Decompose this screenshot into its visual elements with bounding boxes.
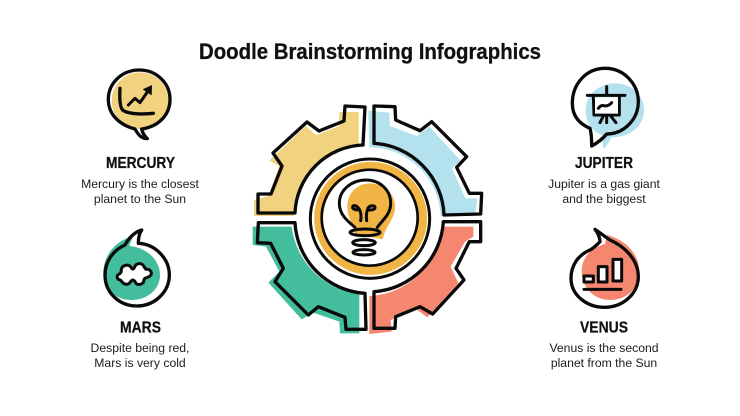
description: mars: Despite being red, (91, 341, 189, 355)
central gear diagram (253, 106, 482, 334)
description: jupiter: Jupiter is a gas giant (548, 177, 660, 191)
description: mercury: Mercury is the closest (81, 177, 200, 191)
panel: venus (549, 229, 659, 370)
heading: mars: MARS (120, 320, 161, 336)
gear segment: red (369, 222, 481, 334)
description: jupiter: and the biggest (562, 192, 646, 206)
center ring (310, 159, 430, 278)
icon: puzzle bubble (103, 230, 169, 306)
description: venus: Venus is the second (549, 341, 659, 355)
gear segment: blue (368, 106, 482, 216)
description: mercury: planet to the Sun (94, 192, 186, 206)
panel: jupiter (548, 68, 660, 206)
gear segment: yellow (254, 106, 365, 216)
heading: mercury: MERCURY (106, 155, 175, 172)
heading: venus: VENUS (580, 320, 628, 336)
title: Doodle Brainstorming Infographics (199, 39, 541, 64)
gear segment: green (253, 223, 366, 333)
panel: mercury (81, 70, 200, 206)
icon: growth chart bubble (108, 70, 170, 139)
icon: presentation board bubble (572, 68, 644, 149)
description: venus: planet from the Sun (551, 356, 657, 370)
icon: light bulb (339, 180, 395, 255)
description: mars: Mars is very cold (94, 356, 186, 370)
icon: bar chart bubble (571, 229, 639, 307)
panel: mars (91, 230, 189, 370)
heading: jupiter: JUPITER (575, 155, 633, 172)
